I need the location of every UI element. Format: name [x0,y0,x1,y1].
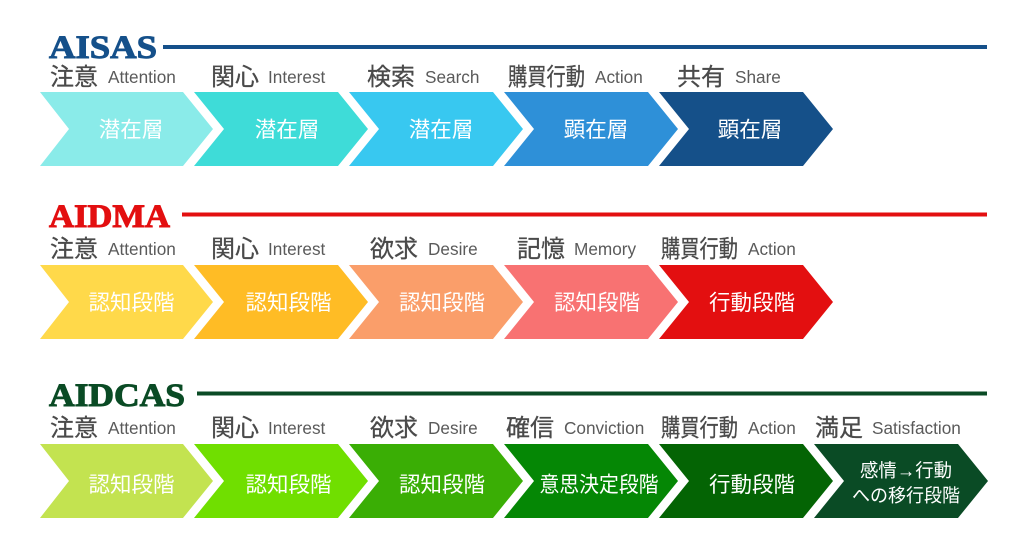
stage label: Attention: Attention [108,418,176,438]
stage label: Interest: Interest [268,67,326,87]
heading: AIDMA: AIDMA [49,199,170,235]
chevron: Desire [349,444,523,518]
stage label: Interest: 関心 [211,236,259,263]
chevron: Interest: 認知段階 [245,473,332,497]
stage label: Interest [211,64,326,91]
stage label: Search: Search [425,67,479,87]
stage label: Memory: Memory [574,239,636,259]
stage label: Memory [517,236,636,263]
stage label: Action: Action [595,67,643,87]
stage label: Desire: 欲求 [370,236,418,263]
chevron: Memory: 認知段階 [554,291,640,315]
chevron: Attention [40,265,213,339]
stage label: Interest: Interest [268,418,326,438]
stage label: Attention [50,236,176,263]
chevron: Satisfaction: への移行段階 [852,485,960,506]
stage label: Search: 検索 [367,64,415,91]
stage label: Action: Action [748,418,796,438]
stage label: Desire: 欲求 [370,415,418,442]
chevron: Memory [504,265,678,339]
chevron: Interest [194,92,368,166]
chevron: Search: 潜在層 [409,118,473,142]
panel: AIDCAS [40,378,988,518]
stage label: Attention: Attention [108,239,176,259]
stage label: Interest [211,236,326,263]
chevron: Conviction [504,444,678,518]
stage label: Conviction: 確信 [506,415,554,442]
stage label: Memory: 記憶 [517,236,565,263]
stage label: Attention: Attention [108,67,176,87]
stage label: Action: 購買行動 [661,236,738,263]
stage label: Interest: Interest [268,239,326,259]
stage label: Action: 購買行動 [661,415,738,442]
panel: AISAS [40,30,987,166]
stage label: Satisfaction: 満足 [815,415,863,442]
stage label: Attention: 注意 [50,64,98,91]
heading: AIDCAS: AIDCAS [49,378,185,414]
chevron: Action: 行動段階 [709,473,795,497]
chevron: Interest [194,265,368,339]
stage label: Desire [370,236,478,263]
chevron: Conviction: 意思決定段階 [540,473,658,497]
chevron: Action: 行動段階 [709,291,795,315]
chevron: Attention: 認知段階 [88,291,175,315]
chevron: Action [659,444,833,518]
stage label: Share [677,64,781,91]
stage label: Search [367,64,479,91]
stage label: Interest [211,415,326,442]
chevron: Interest: 認知段階 [245,291,332,315]
stage label: Attention: 注意 [50,236,98,263]
stage label: Satisfaction [815,415,961,442]
chevron: Interest [194,444,368,518]
stage label: Conviction: Conviction [564,418,644,438]
chevron: Interest: 潜在層 [255,118,319,142]
chevron: Satisfaction: 感情→行動 [860,460,952,481]
stage label: Interest: 関心 [211,415,259,442]
stage label: Satisfaction: Satisfaction [872,418,961,438]
chevron: Action: 顕在層 [564,118,628,142]
stage label: Desire: Desire [428,239,478,259]
panel: AIDMA [40,199,987,339]
stage label: Interest: 関心 [211,64,259,91]
chevron: Desire [349,265,523,339]
chevron: Action [659,265,833,339]
chevron: Attention [40,92,213,166]
chevron: Desire: 認知段階 [399,473,485,497]
chevron: Attention: 潜在層 [99,118,163,142]
chevron: Attention [40,444,213,518]
chevron: Attention: 認知段階 [88,473,175,497]
stage label: Attention [50,64,176,91]
chevron: Desire: 認知段階 [399,291,485,315]
stage label: Conviction [506,415,644,442]
stage label: Share: Share [735,67,781,87]
stage label: Share: 共有 [677,64,725,91]
stage label: Action: Action [748,239,796,259]
heading: AISAS: AISAS [49,30,157,66]
chevron: Satisfaction [814,444,988,518]
chevron: Share: 顕在層 [718,118,782,142]
stage label: Action: 購買行動 [508,64,585,91]
chevron: Share [659,92,833,166]
chevron: Action [504,92,678,166]
stage label: Desire [370,415,478,442]
stage label: Desire: Desire [428,418,478,438]
stage label: Attention: 注意 [50,415,98,442]
stage label: Attention [50,415,176,442]
chevron: Search [349,92,523,166]
